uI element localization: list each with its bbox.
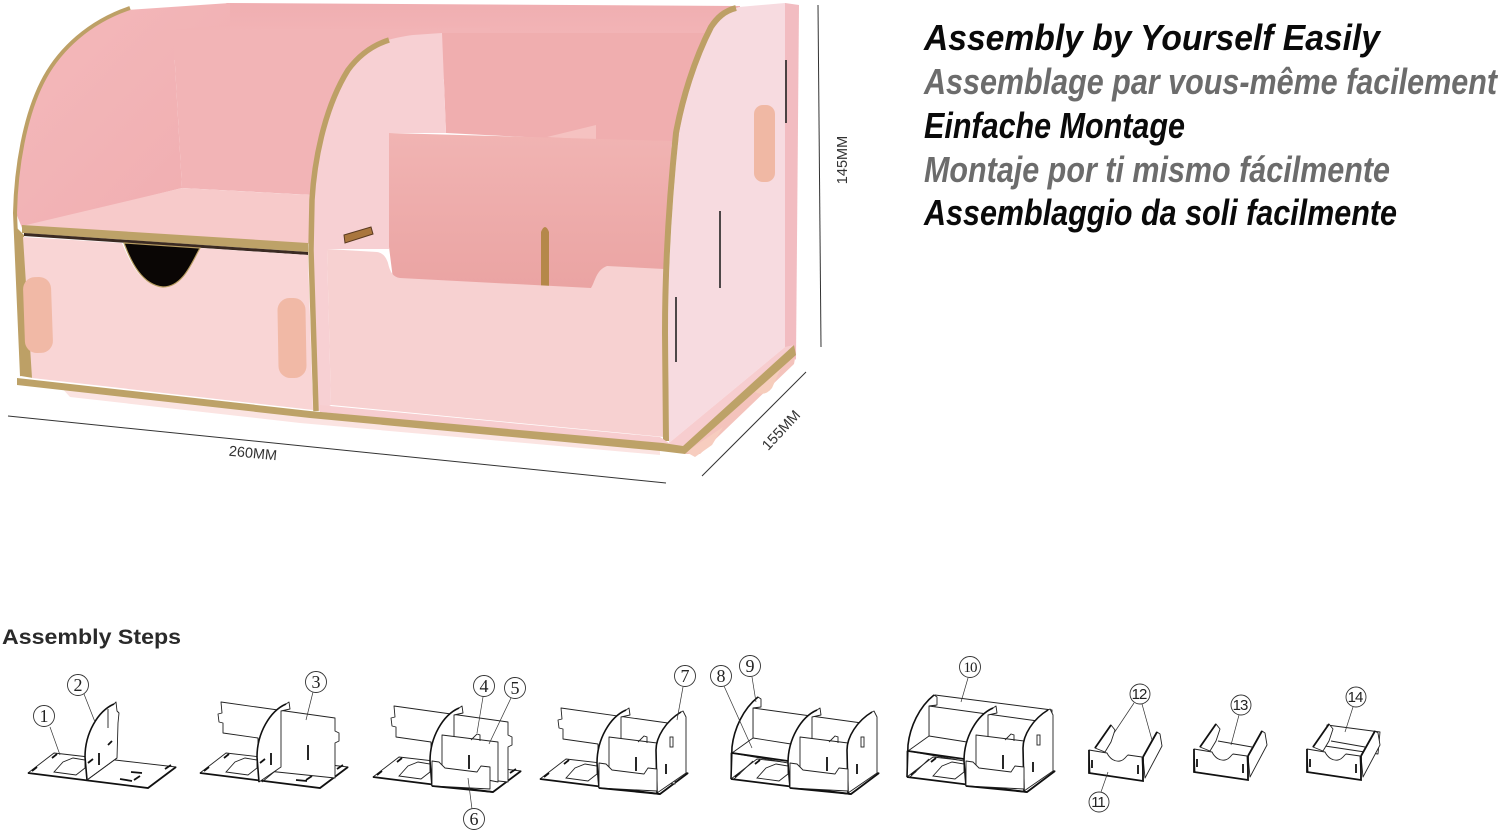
callout 4: 4: [480, 676, 488, 696]
right side wall: [668, 3, 785, 443]
drawer step: part 14: [1307, 724, 1380, 780]
slot in inner panel: [541, 227, 549, 288]
dimension: height 145MM: 145MM: [835, 136, 851, 184]
callout 11: [1089, 772, 1109, 812]
product photo: pink desk organizer: [14, 3, 799, 457]
wood strip beside drawer: [14, 225, 33, 378]
base wood strip: [17, 345, 796, 454]
callout 12: 12: [1132, 686, 1147, 703]
right knob: [754, 105, 775, 182]
part number callouts: [34, 656, 1366, 830]
rear panel: [173, 3, 740, 60]
multilingual headline block: Assemblaggio da soli facilmente: [923, 192, 1397, 233]
callout 12: [1114, 684, 1152, 740]
drawer: [23, 237, 313, 410]
callout 10: [960, 656, 980, 702]
center divider wood edge: [311, 40, 389, 411]
callout 10: 10: [964, 660, 977, 676]
dark gap above drawer: [24, 233, 308, 255]
callout 14: [1345, 687, 1366, 732]
step diagram: parts 4, 5 and 6: [373, 706, 521, 792]
left side wall inner face: [16, 3, 230, 228]
callout 2: [68, 674, 95, 722]
base top surface: [320, 345, 794, 447]
drawer step: part 13: [1194, 724, 1267, 780]
callout 9: [740, 656, 760, 702]
front box: [327, 249, 664, 437]
multilingual headline block: [923, 17, 1499, 233]
step diagram: parts 8 and 9: [731, 697, 879, 794]
callout 1: 1: [40, 706, 48, 726]
callout 2: 2: [74, 675, 82, 695]
callout 4: [474, 676, 494, 733]
callout 8: [710, 666, 752, 748]
callout 7: 7: [680, 666, 690, 686]
callout 3: 3: [312, 672, 320, 692]
callout 9: 9: [746, 656, 754, 676]
dimension: width 260MM: 260MM: [228, 444, 278, 464]
callout 3: [306, 672, 326, 720]
shelf front wood edge: [22, 225, 308, 252]
dimension: depth 155MM: 155MM: [759, 408, 804, 454]
step diagram: part 7: [540, 708, 688, 794]
multilingual headline block: Montaje por ti mismo fácilmente: [924, 149, 1390, 190]
drawer step: parts 11 and 12: [1089, 725, 1162, 781]
dimension: depth 155MM: [702, 372, 806, 476]
step diagram: part 3: [200, 702, 348, 788]
callout 8: 8: [716, 666, 726, 686]
callout 6: [464, 778, 484, 830]
right wall wood edge: [665, 8, 736, 441]
callout 1: [34, 706, 60, 755]
right wall slots: [676, 60, 786, 362]
step diagram: parts 1 and 2: [28, 702, 176, 788]
multilingual headline block: Assembly by Yourself Easily: [923, 17, 1382, 58]
drawer notch: [124, 243, 200, 287]
inner panel: [389, 133, 672, 295]
step diagram: part 10: [907, 695, 1055, 792]
callout 13: 13: [1233, 697, 1248, 714]
callout 6: 6: [470, 809, 478, 829]
left wall wood edge: [15, 8, 130, 376]
soft shadow and feet under organizer: [60, 353, 796, 457]
multilingual headline block: Einfache Montage: [924, 105, 1185, 146]
callout 5: 5: [510, 678, 520, 698]
center divider face: [310, 33, 446, 411]
callout 5: [489, 678, 526, 744]
drawer knobs: [23, 277, 307, 378]
callout 14: 14: [1348, 689, 1363, 706]
assembly steps heading: Assembly Steps: [2, 626, 181, 649]
callout 13: [1231, 695, 1251, 745]
inner divider tip: [547, 125, 596, 140]
middle back panel: [173, 28, 490, 195]
slot in center divider: [344, 227, 373, 243]
right compartment back panel: [442, 33, 712, 145]
dimension: width 260MM: [8, 416, 666, 483]
back panel side sliver: [785, 3, 799, 360]
shelf top: [22, 188, 310, 244]
callout 11: 11: [1091, 794, 1105, 811]
dimension: height 145MM: [818, 5, 851, 347]
callout 7: [674, 666, 696, 720]
